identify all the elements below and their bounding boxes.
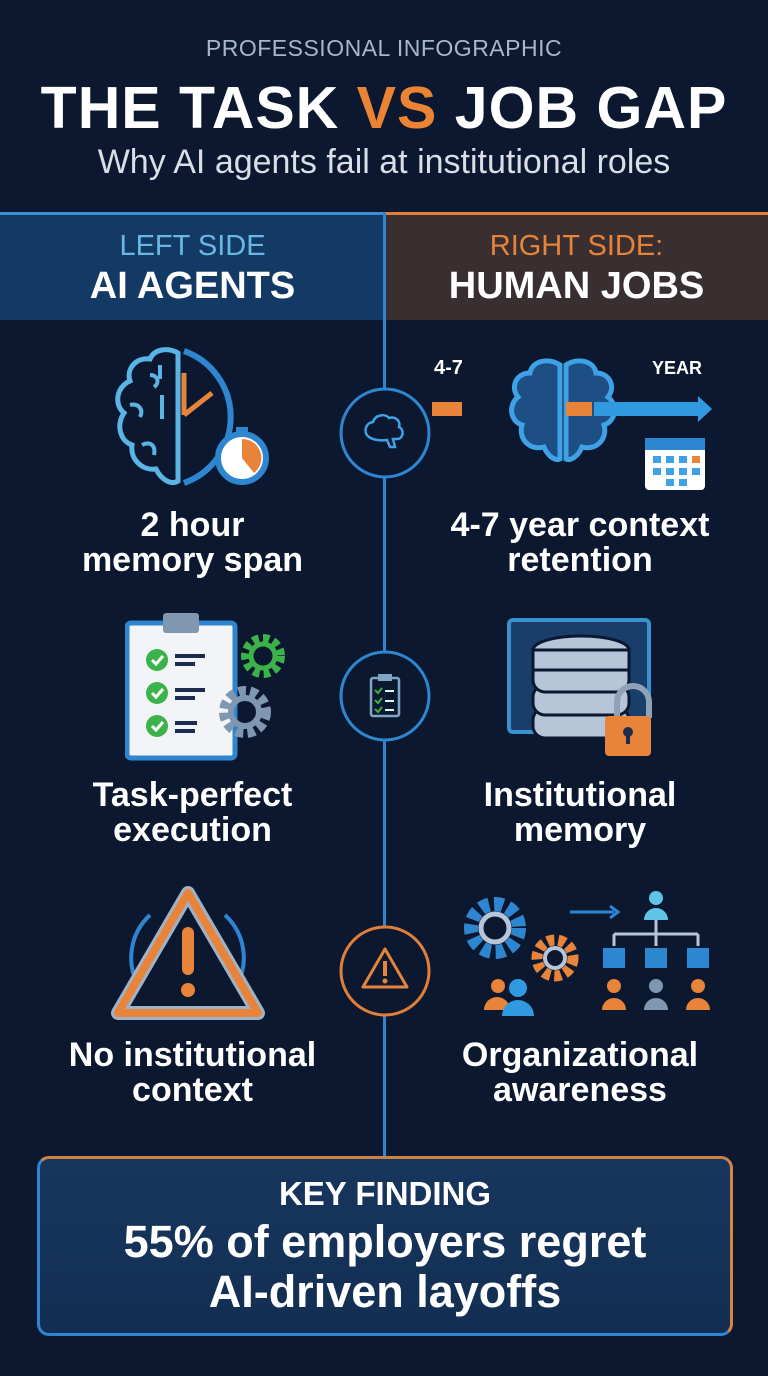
divider line: [383, 212, 386, 1157]
icon: center clipboard circle: [340, 650, 430, 742]
icon: center brain circle: [340, 388, 430, 478]
title: THE TASK VS JOB GAP: [41, 75, 727, 141]
icon: brain timeline: 4-7: [434, 357, 463, 379]
callout: key finding: [37, 1156, 733, 1336]
label: institutional memory: [484, 776, 676, 849]
icon: org chart: [464, 891, 710, 1016]
label: no institutional: No institutional: [69, 1036, 316, 1074]
key finding text: AI-driven layoffs: [209, 1266, 561, 1317]
key finding text: 55% of employers regret: [124, 1216, 646, 1267]
panel header: left: [0, 212, 385, 320]
label: institutional memory: Institutional: [484, 776, 676, 814]
label: organizational awareness: [462, 1036, 698, 1109]
panel header: right: [385, 212, 768, 320]
supertitle: PROFESSIONAL INFOGRAPHIC: [206, 35, 562, 61]
panel header: right: RIGHT SIDE:: [490, 230, 663, 262]
label: organizational awareness: Organizational: [462, 1036, 698, 1074]
label: 2 hour: memory span: [82, 541, 303, 579]
icon: brain with clock: [115, 347, 269, 486]
label: organizational awareness: awareness: [493, 1071, 667, 1109]
label: no institutional: context: [132, 1071, 253, 1109]
key finding text: [124, 1216, 646, 1317]
subtitle: Why AI agents fail at institutional roles: [98, 143, 670, 181]
label: 4-7 year: retention: [507, 541, 653, 579]
label: 2 hour: [82, 506, 303, 579]
label: 4-7 year: 4-7 year context: [451, 506, 709, 544]
panel header: right: HUMAN JOBS: [449, 265, 704, 307]
icon: clipboard with gears: [125, 613, 285, 760]
label: task-perfect: [93, 776, 292, 849]
label: task-perfect: execution: [113, 811, 272, 849]
panel header: left: LEFT SIDE: [119, 230, 266, 262]
label: institutional memory: memory: [514, 811, 646, 849]
icon: warning triangle: [111, 886, 265, 1020]
panel header: left: AI AGENTS: [90, 265, 295, 307]
label: task-perfect: Task-perfect: [93, 776, 292, 814]
icon: center warning circle: [340, 926, 430, 1016]
icon: brain timeline: [432, 357, 712, 490]
label: 4-7 year: [451, 506, 710, 579]
label: 2 hour: 2 hour: [141, 506, 244, 544]
key finding heading: KEY FINDING: [279, 1175, 491, 1212]
icon: database lock: [507, 618, 652, 756]
icon: brain timeline: YEAR: [652, 358, 702, 378]
label: no institutional: [69, 1036, 316, 1109]
